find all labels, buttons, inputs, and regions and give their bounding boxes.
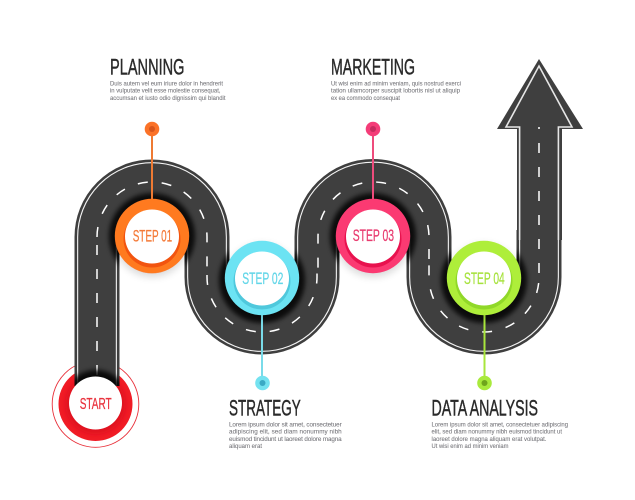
start badge bbox=[69, 376, 122, 430]
start badge: START bbox=[80, 396, 112, 413]
marker: strategy bbox=[255, 312, 270, 390]
text block: data analysis: DATA ANALYSIS bbox=[432, 396, 538, 421]
step 02 badge: STEP 02 bbox=[242, 270, 283, 288]
text block: marketing: ex ea commodo consequat bbox=[331, 95, 400, 102]
step 03 badge: STEP 03 bbox=[353, 227, 394, 245]
arrow inner outline bbox=[506, 66, 572, 240]
text block: marketing bbox=[331, 55, 461, 102]
marker: marketing bbox=[366, 122, 380, 200]
road edge lines bbox=[97, 182, 539, 386]
step 01 badge: STEP 01 bbox=[133, 228, 172, 246]
infographic canvas bbox=[52, 58, 583, 450]
text block: planning: accumsan et iusto odio dignissim qui blandit bbox=[110, 95, 226, 102]
text block: planning bbox=[110, 55, 226, 102]
start ring bbox=[52, 361, 139, 447]
marker: planning bbox=[145, 122, 159, 200]
road surface bbox=[97, 182, 539, 386]
text block: strategy: euismod tincidunt ut laoreet dolore magna bbox=[229, 436, 342, 443]
step 03 badge bbox=[336, 199, 410, 277]
centre dashes bbox=[97, 127, 539, 375]
text block: data analysis: Lorem ipsum dolor sit amet, consectetuer adipiscing bbox=[432, 422, 568, 428]
text block: strategy: Lorem ipsum dolor sit amet, consectetuer bbox=[229, 422, 342, 428]
road shadows beneath the step circles bbox=[74, 191, 529, 386]
text block: planning: Duis autem vel eum iriure dolor in hendrerit bbox=[110, 80, 223, 88]
arrow head bbox=[497, 59, 583, 240]
text block: planning: in vulputate velit esse molestie consequat, bbox=[110, 88, 221, 95]
road inner surface bbox=[97, 182, 539, 387]
step 04 badge bbox=[447, 241, 521, 318]
text block: marketing: tation ullamcorper suscipit lobortis nisl ut aliquip bbox=[331, 88, 460, 95]
text block: data analysis: laoreet dolore magna aliquam erat volutpat. bbox=[432, 436, 547, 443]
text block: data analysis: Ut wisi enim ad minim veniam bbox=[432, 443, 508, 450]
road with arrow bbox=[97, 59, 583, 387]
marker: data analysis bbox=[477, 312, 492, 390]
text block: strategy bbox=[229, 396, 342, 450]
text block: planning: PLANNING bbox=[110, 55, 184, 80]
text block: strategy: aliquam erat bbox=[229, 443, 262, 450]
text block: strategy: STRATEGY bbox=[229, 396, 301, 421]
text block: data analysis: elit, sed diam nonummy nibh euismod tincidunt ut bbox=[432, 429, 562, 436]
step 02 badge bbox=[225, 241, 299, 318]
text block: marketing: MARKETING bbox=[331, 55, 415, 80]
text block: marketing: Ut wisi enim ad minim veniam, quis nostrud exerci bbox=[331, 80, 461, 88]
text block: data analysis bbox=[432, 396, 568, 450]
step 04 badge: STEP 04 bbox=[464, 270, 505, 288]
text block: strategy: adipiscing elit, sed diam nonummy nibh bbox=[229, 429, 342, 436]
step 01 badge bbox=[115, 199, 189, 277]
